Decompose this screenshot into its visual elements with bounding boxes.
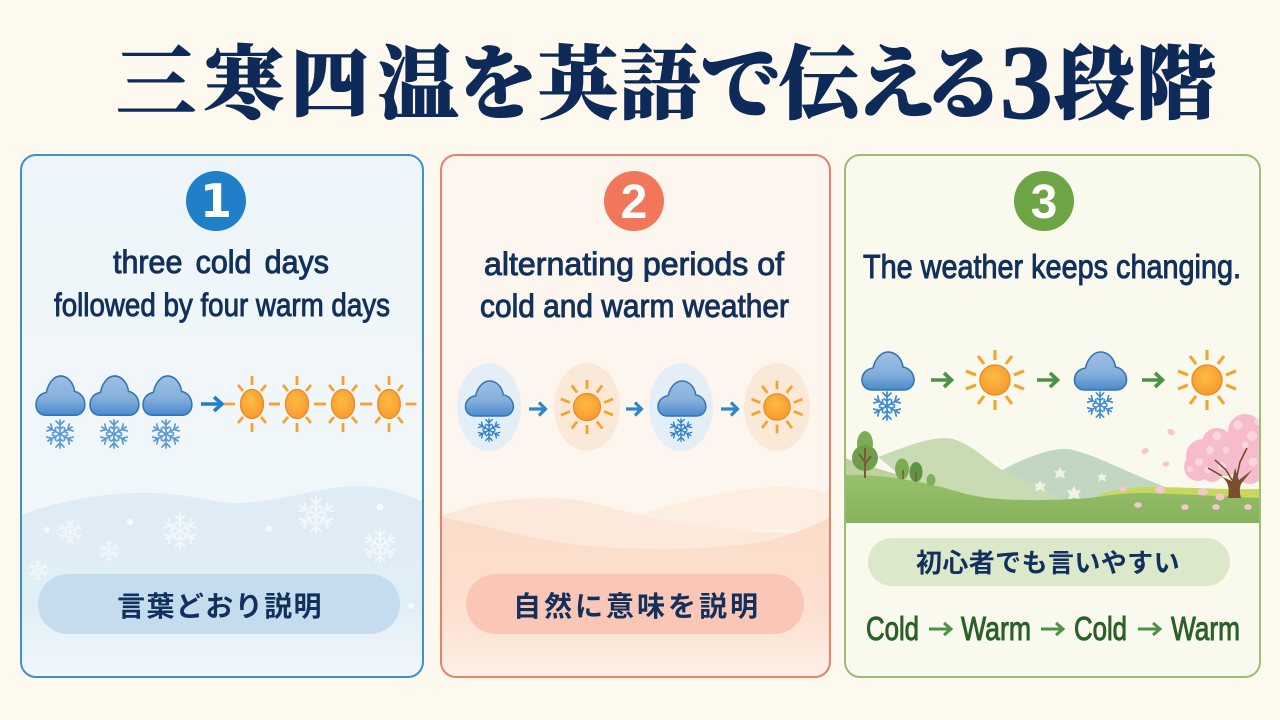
heading 2: cold and warm weather — [480, 288, 789, 324]
cherry tree — [1184, 414, 1265, 498]
label pill 1: 言葉どおり説明 — [117, 591, 323, 622]
panel: step 1 literal explanation — [21, 155, 423, 677]
label pill 1 — [38, 574, 400, 634]
phrase: Cold Warm Cold Warm: Cold — [1074, 610, 1127, 647]
icons: cold warm cycle — [862, 350, 1236, 420]
badge 3 — [1014, 171, 1074, 231]
badge 3: 3 — [1031, 176, 1057, 229]
phrase: Cold Warm Cold Warm: Warm — [1171, 610, 1240, 647]
label pill 3: 初心者でも言いやすい — [916, 548, 1180, 578]
warm hills — [441, 487, 830, 677]
label pill 3 — [868, 538, 1230, 586]
title: 三寒四温を英語で伝える — [116, 42, 1004, 130]
heading 1: three cold days — [113, 244, 329, 280]
icons: three cold days — [36, 376, 192, 448]
icons: alternating sequence — [457, 363, 810, 451]
heading 1: followed by four warm days — [54, 287, 390, 323]
tree left — [852, 431, 878, 478]
falling petals — [1119, 428, 1252, 510]
badge 2 — [604, 171, 664, 231]
title: 段階 — [1054, 42, 1216, 130]
heading 2 — [480, 246, 789, 324]
heading 1 — [54, 244, 390, 323]
snowy hills — [22, 486, 422, 644]
badge 1: 1 — [200, 174, 232, 228]
spring landscape — [845, 414, 1265, 523]
phrase: Cold Warm Cold Warm: Cold — [866, 610, 919, 647]
heading 2: alternating periods of — [484, 246, 784, 282]
panel: step 2 natural explanation — [441, 155, 830, 677]
label pill 2 — [466, 574, 804, 634]
label pill 2: 自然に意味を説明 — [513, 591, 761, 622]
arrow — [201, 397, 222, 411]
small trees — [895, 458, 936, 486]
icons: four warm days — [224, 376, 416, 432]
phrase: Cold Warm Cold Warm — [866, 610, 1240, 647]
phrase: Cold Warm Cold Warm: Warm — [961, 610, 1031, 647]
badge 2: 2 — [621, 176, 647, 229]
title: 3 — [1000, 24, 1053, 141]
badge 1 — [186, 171, 246, 231]
panel: step 3 simple phrase — [845, 155, 1265, 677]
